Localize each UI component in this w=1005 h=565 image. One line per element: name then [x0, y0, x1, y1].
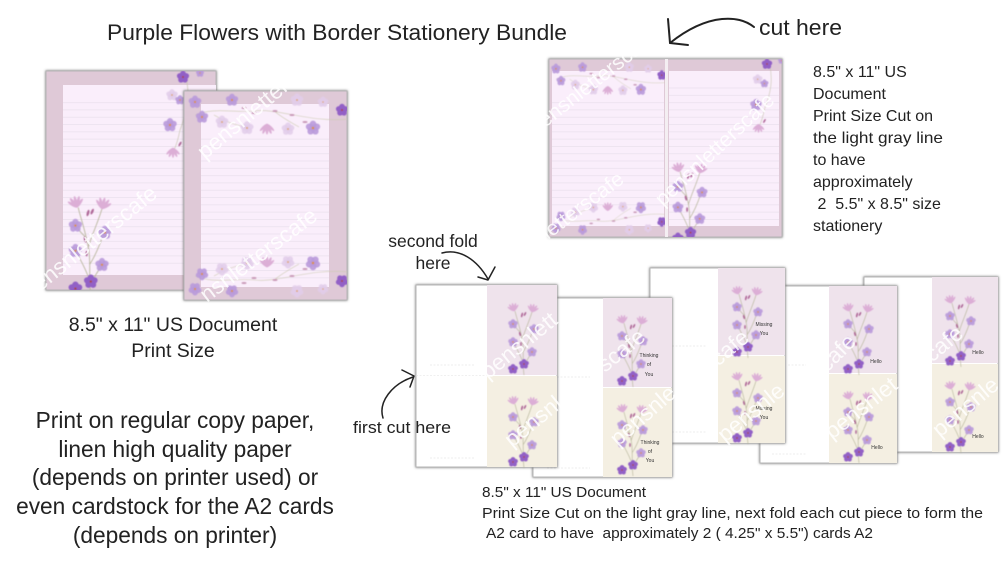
watermarks: pensnletter — [192, 73, 294, 164]
card sheet: Missing You: Missing — [756, 322, 773, 328]
label: cut here: cut here — [759, 15, 842, 40]
right half — [669, 57, 785, 245]
label: second fold — [388, 231, 478, 273]
watermarks: pensnlett — [475, 307, 563, 384]
title: Purple Flowers with Border Stationery Bundle — [107, 20, 567, 45]
text block: paper advice — [16, 407, 334, 548]
card sheet: Thinking of You: of — [647, 362, 652, 368]
label: second fold: second fold — [388, 231, 478, 251]
card sheet: Hello (back): Hello — [972, 434, 984, 440]
text block: card instructions: Print Size Cut on the light gray line, next fold each cut piece to form the — [482, 505, 983, 522]
arrow: second fold — [442, 252, 495, 280]
card sheet: Hello (front): Hello — [871, 445, 883, 451]
arrow: cut here — [668, 19, 754, 45]
stationery sheet: side flowers — [46, 69, 216, 297]
two-up stationery sheet — [549, 57, 785, 245]
stationery sheet: garland — [184, 91, 349, 300]
card sheet: Missing You: You — [760, 331, 768, 337]
watermarks — [27, 37, 1004, 452]
watermarks: pensnlet — [820, 371, 903, 444]
card sheet: Hello (front) — [760, 286, 897, 463]
text block: two-up size: Document — [813, 86, 886, 103]
card sheet: Thinking of You: of — [648, 449, 653, 455]
card sheet: Thinking of You: Thinking — [641, 440, 660, 446]
text block: paper advice: (depends on printer used) or — [32, 464, 319, 490]
watermarks: pensnle — [605, 380, 681, 451]
card sheet: Hello (back): Hello — [972, 350, 984, 356]
watermarks: letterscafe — [537, 167, 628, 244]
card sheet: Thinking of You: You — [646, 458, 654, 464]
text block: paper advice: (depends on printer) — [73, 522, 277, 548]
watermarks: nsnletterscafe — [195, 203, 322, 307]
watermarks: ensnletterscafe — [27, 180, 162, 296]
text block: paper advice: Print on regular copy paper, — [36, 407, 314, 433]
watermarks: cafe — [705, 324, 754, 371]
text block: paper advice: even cardstock for the A2 cards — [16, 493, 334, 519]
text block: card instructions: 8.5" x 11" US Document — [482, 484, 647, 501]
left half — [551, 62, 667, 235]
text block: two-up size: the light gray line — [813, 130, 943, 147]
label: first cut here: first cut here — [353, 418, 451, 437]
card sheet: Missing You: Missing — [756, 406, 773, 412]
text block: two-up size: 8.5" x 11" US — [813, 64, 907, 81]
caption: stationery size — [69, 314, 278, 362]
text block: card instructions: A2 card to have approximately 2 ( 4.25" x 5.5") cards A2 — [486, 525, 873, 542]
text block: two-up size: stationery — [813, 218, 882, 235]
text block: paper advice: linen high quality paper — [58, 436, 292, 462]
card sheet: Missing You: You — [760, 415, 768, 421]
card sheet: Thinking of You: Thinking — [640, 353, 659, 359]
watermarks: pensnletterscafe — [651, 89, 779, 211]
watermarks: scafe — [592, 324, 650, 377]
text block: card instructions — [482, 484, 983, 542]
card sheet: Missing You — [650, 268, 785, 444]
watermarks: ensnlettersca — [534, 37, 647, 132]
text block: two-up size — [813, 64, 943, 235]
watermarks: pensnl — [499, 391, 567, 452]
watermarks: cafe — [813, 329, 861, 377]
text block: two-up size: 2 5.5" x 8.5" size — [813, 196, 941, 213]
label: second fold: here — [415, 253, 451, 273]
watermarks: pensnle — [712, 378, 789, 447]
card sheet: Hello (front): Hello — [870, 359, 882, 365]
caption: stationery size: 8.5" x 11" US Document — [69, 314, 278, 336]
card sheet: Thinking of You: You — [645, 372, 653, 378]
card sheet: Hello (back) — [864, 277, 998, 453]
watermarks: pensnle — [927, 372, 1004, 442]
watermarks: cafe — [919, 320, 968, 367]
text block: two-up size: to have — [813, 152, 866, 169]
text block: two-up size: Print Size Cut on — [813, 108, 933, 125]
caption: stationery size: Print Size — [131, 340, 215, 362]
card sheet: Thinking of You — [533, 298, 672, 477]
arrow: first cut — [382, 370, 414, 418]
text block: two-up size: approximately — [813, 174, 913, 191]
card sheet: blank front — [416, 285, 557, 468]
